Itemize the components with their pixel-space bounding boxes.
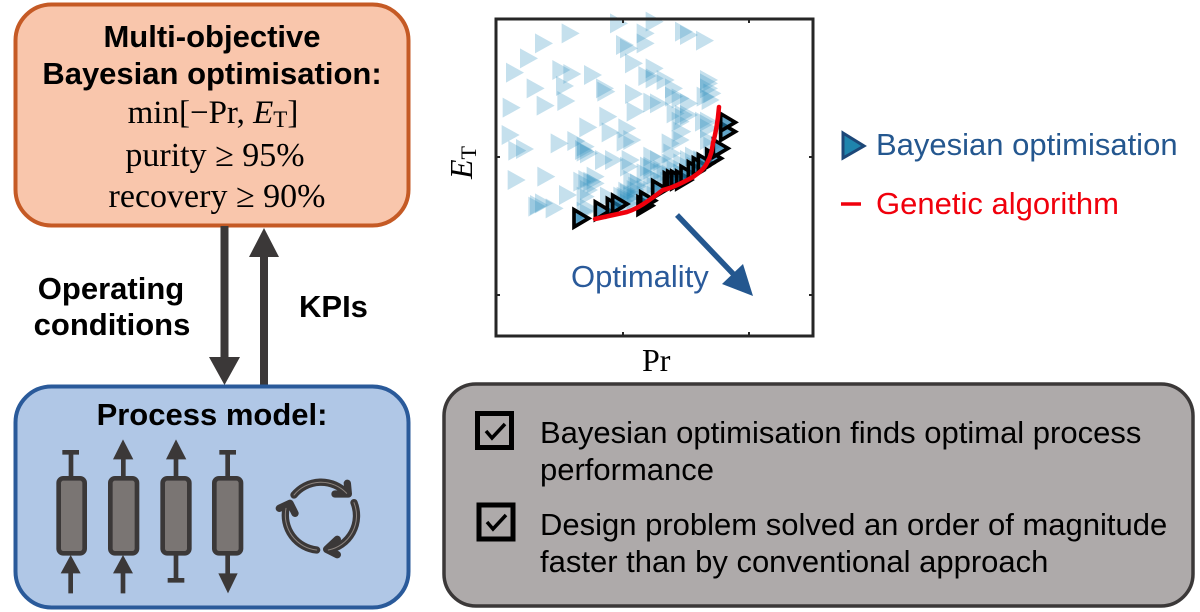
label: optimality: Optimality <box>571 259 709 294</box>
label: operating conditions: conditions <box>34 307 190 342</box>
Pareto-front samples <box>574 114 735 227</box>
text: finding 1: Bayesian optimisation finds optimal process <box>540 415 1141 450</box>
axis label: Pr: Pr <box>642 342 671 378</box>
recovery constraint: recovery ≥ 90% <box>109 178 325 215</box>
panel: process model <box>16 386 408 608</box>
arrow: operating conditions (down) <box>209 226 240 385</box>
heading: process model: Process model: <box>97 397 327 432</box>
scatter chart: Pr vs ET <box>443 12 813 378</box>
label: operating conditions: Operating <box>38 271 184 306</box>
plot frame and ticks <box>496 19 813 336</box>
arrow: optimality <box>677 215 753 296</box>
text: finding 2: Design problem solved an order of magnitude <box>540 507 1167 542</box>
text: finding 1: performance <box>540 452 714 487</box>
icon: checkbox 2 <box>479 505 513 539</box>
panel: conclusions <box>444 384 1193 606</box>
icon: checkbox 1 <box>478 414 512 448</box>
axis label: E_T: E <box>443 159 479 180</box>
objective formula: min[−Pr, E <box>128 95 273 131</box>
Bayesian optimisation samples <box>502 12 721 222</box>
objective formula: T <box>273 107 287 132</box>
panel: multi-objective Bayesian optimisation <box>16 4 408 226</box>
heading: multi-objective Bayesian optimisation: Multi-objective <box>103 19 321 54</box>
Genetic algorithm curve <box>595 107 719 219</box>
icon: recycle loop <box>279 482 357 555</box>
icon: four process columns <box>59 439 241 593</box>
heading: multi-objective Bayesian optimisation: Bayesian optimisation: <box>42 56 382 91</box>
text: finding 2: faster than by conventional approach <box>540 544 1048 579</box>
legend: Bayesian optimisation: Bayesian optimisation <box>876 127 1178 162</box>
label: KPIs: KPIs <box>299 289 368 324</box>
arrow: KPIs (up) <box>249 228 279 387</box>
objective formula: ] <box>287 95 298 131</box>
legend: genetic algorithm: Genetic algorithm <box>876 186 1119 221</box>
purity constraint: purity ≥ 95% <box>125 137 305 174</box>
axis label: E_T: T <box>456 145 481 159</box>
